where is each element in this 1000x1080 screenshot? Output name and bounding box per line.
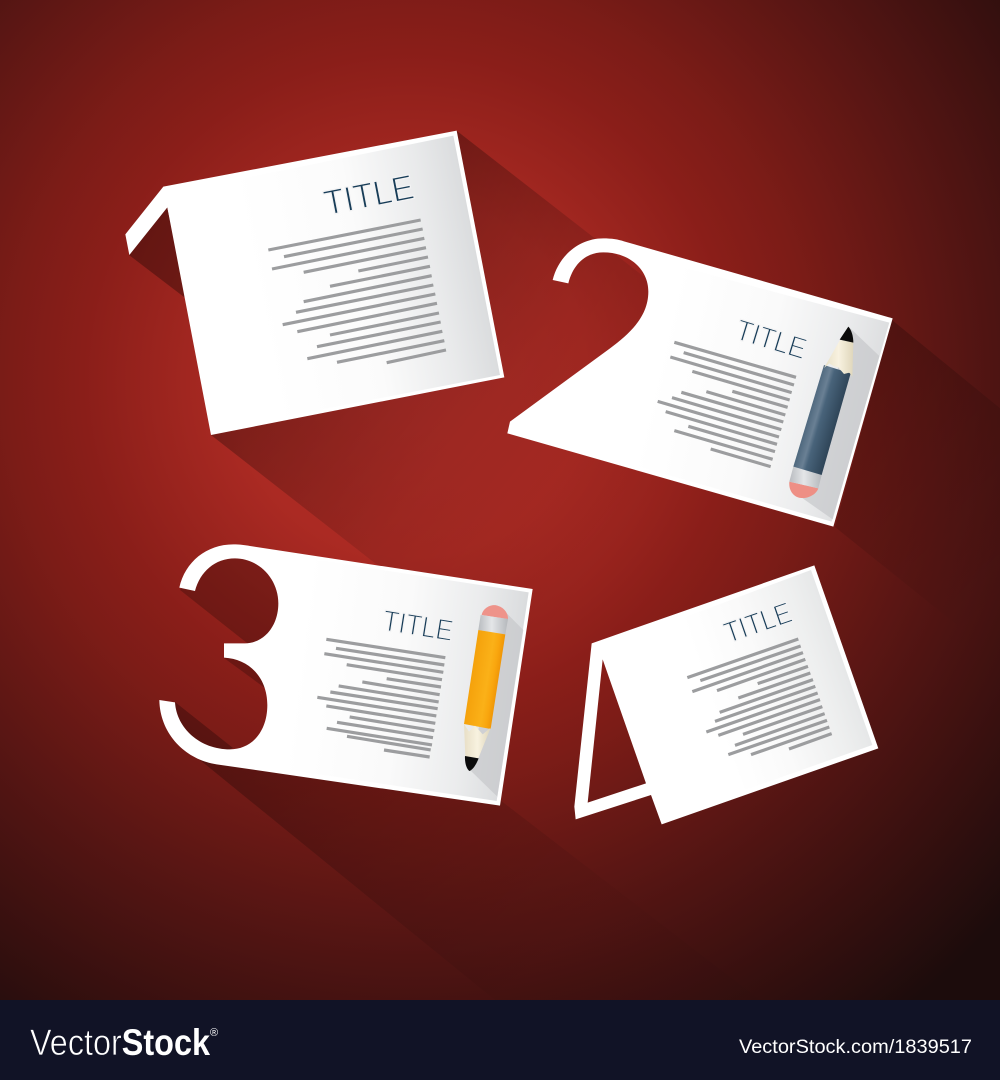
card 2 inner sheet bbox=[633, 267, 889, 522]
card 3 pencil shadow bbox=[470, 610, 523, 797]
numeral 1 paper shape bbox=[125, 131, 504, 435]
panel: card 4 bbox=[574, 565, 878, 824]
card 1 text lines bbox=[268, 220, 446, 363]
card 1 inner sheet bbox=[167, 136, 500, 430]
panel: card 2 bbox=[507, 238, 893, 527]
panel: card 3 bbox=[159, 544, 533, 806]
footer bar bbox=[0, 1000, 1000, 1080]
icon: yellow pencil bbox=[464, 605, 508, 771]
card 3 title: TITLE bbox=[381, 604, 456, 648]
numeral 3 paper shape bbox=[159, 544, 533, 806]
panel: card 1 bbox=[125, 131, 504, 435]
card 2 pencil shadow bbox=[802, 327, 879, 519]
registered mark: ® bbox=[210, 1027, 218, 1039]
VectorStock logo: VectorStock bbox=[30, 1022, 210, 1063]
long shadows bbox=[129, 131, 1000, 1080]
numeral 2 paper shape bbox=[507, 238, 893, 527]
card 3 inner sheet bbox=[283, 559, 529, 801]
card 1 title: TITLE bbox=[321, 168, 417, 223]
card 2 text lines bbox=[658, 342, 796, 467]
image id: VectorStock.com/1839517 bbox=[739, 1037, 972, 1058]
card 3 text lines bbox=[317, 639, 445, 757]
card 4 title: TITLE bbox=[720, 596, 796, 650]
icon: blue pencil bbox=[789, 327, 853, 498]
numeral 4 paper shape bbox=[574, 565, 878, 824]
card 4 inner sheet bbox=[682, 570, 872, 790]
card 4 text lines bbox=[687, 639, 832, 755]
card 2 title: TITLE bbox=[732, 313, 810, 366]
